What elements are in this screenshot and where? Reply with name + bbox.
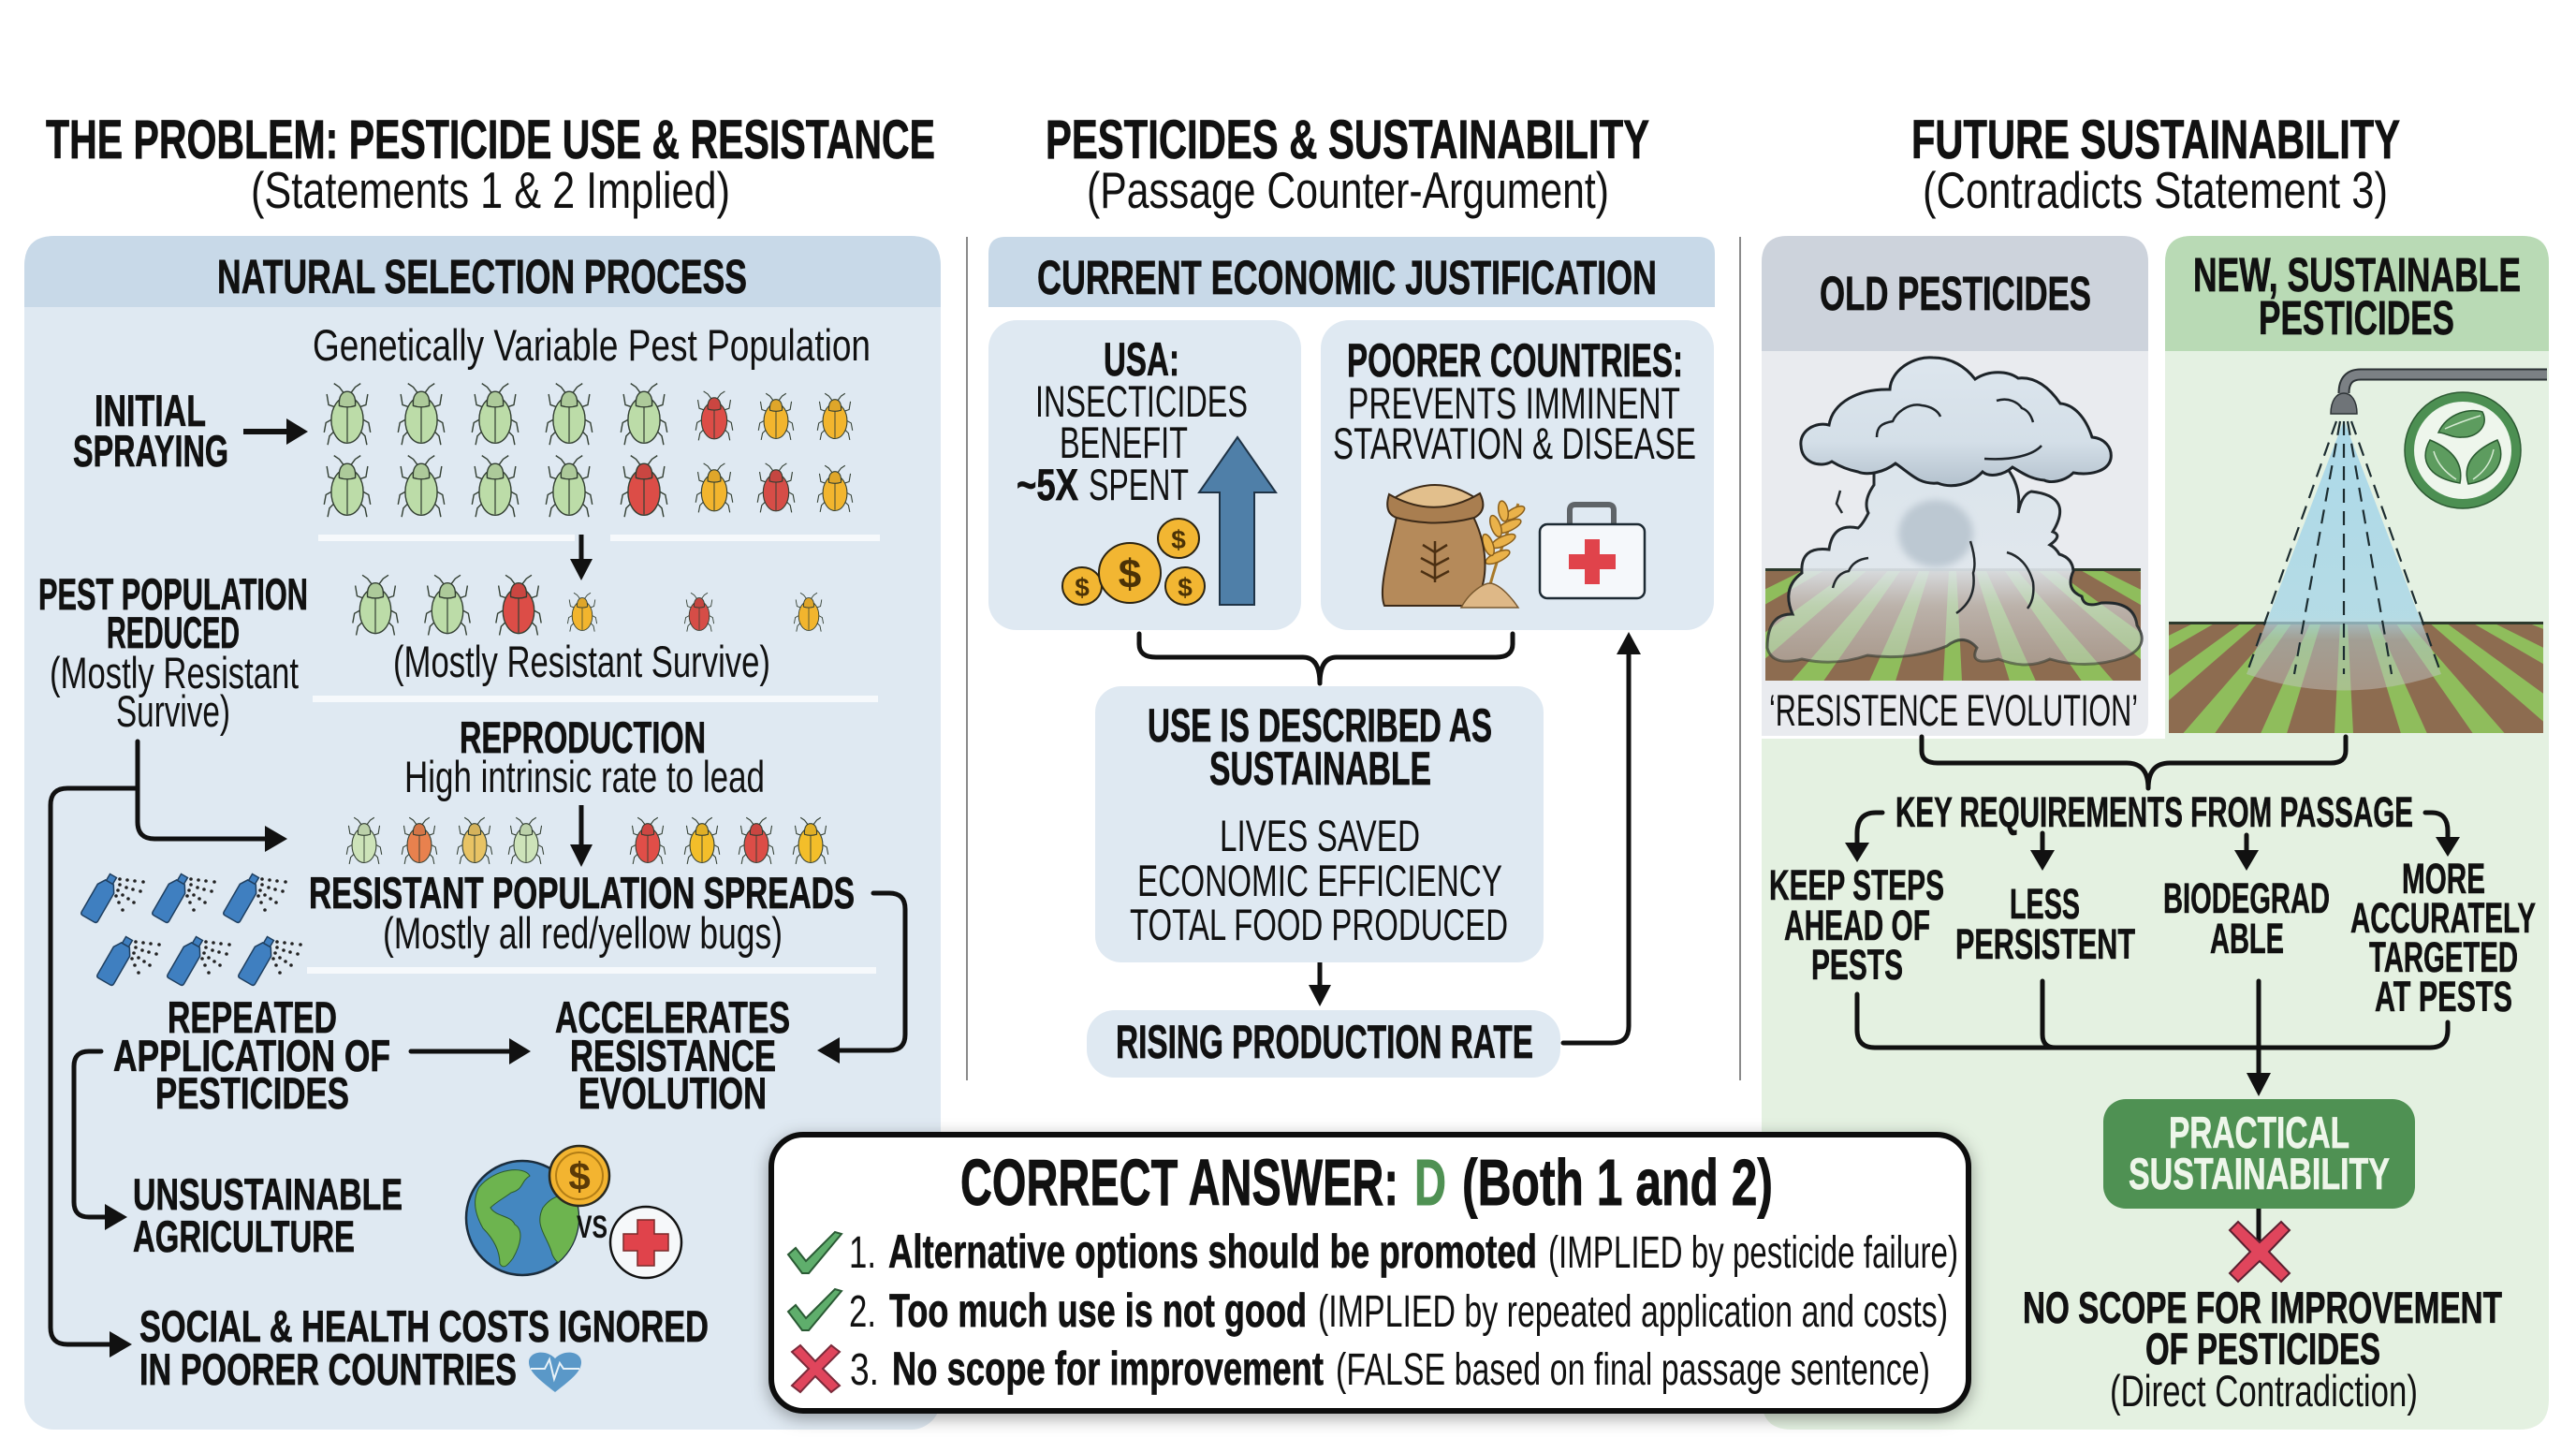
- arrow: survivors to reproduction: [138, 741, 287, 852]
- heading: the problem: THE PROBLEM: PESTICIDE USE & RESISTANCE: [46, 110, 935, 170]
- card: usa: USA:: [1104, 333, 1179, 386]
- icon: up arrow: [1199, 437, 1276, 605]
- icon: red cross mark: [2230, 1209, 2290, 1282]
- text: keep steps ahead: AHEAD OF: [1784, 902, 1930, 949]
- heading: future sustainability: [1911, 110, 2400, 219]
- icon: coins: [1062, 519, 1205, 605]
- divider: left and middle: [966, 237, 968, 1080]
- heading: correct answer: (Both 1 and 2): [1462, 1146, 1773, 1219]
- heading: pesticides and sustainability: PESTICIDES & SUSTAINABILITY: [1046, 110, 1649, 170]
- icon: coins: $: [1075, 573, 1090, 602]
- text: pest population reduced: (Mostly Resistant: [50, 648, 299, 697]
- illustration: field: [1765, 568, 2141, 681]
- statement one: 1.: [849, 1228, 876, 1278]
- icon: medical kit: [1540, 505, 1645, 598]
- text: pest population reduced: REDUCED: [107, 608, 240, 657]
- icons: surviving bugs: [353, 575, 824, 635]
- card: use is described as sustainable: TOTAL FOOD PRODUCED: [1130, 900, 1508, 949]
- text: mostly resistant survive: (Mostly Resistant Survive): [393, 637, 770, 686]
- heading: current economic justification: CURRENT ECONOMIC JUSTIFICATION: [1037, 251, 1657, 304]
- statement three: [850, 1343, 1930, 1395]
- card: poorer countries: PREVENTS IMMINENT: [1348, 378, 1680, 428]
- card: poorer countries: [1321, 320, 1714, 630]
- icons: spray bottles: [80, 871, 302, 986]
- panel: lower green requirements: [1762, 739, 2549, 1430]
- text: initial spraying: INITIAL: [95, 386, 206, 435]
- card: rising production rate: RISING PRODUCTION RATE: [1116, 1016, 1533, 1068]
- heading: pesticides and sustainability: (Passage Counter-Argument): [1087, 161, 1609, 219]
- text: pest population reduced: [38, 569, 308, 736]
- card: usa: ~5X: [1017, 460, 1078, 509]
- heading: future sustainability: FUTURE SUSTAINABILITY: [1911, 110, 2400, 170]
- icon: globe money vs health: [466, 1146, 681, 1278]
- arrows: requirements fan out: [1845, 813, 2460, 871]
- icon: check one: [788, 1232, 842, 1273]
- text: keep steps ahead: PESTS: [1811, 941, 1903, 989]
- text: pest population reduced: PEST POPULATION: [38, 569, 308, 619]
- statement two: [849, 1284, 1948, 1337]
- text: unsustainable agriculture: AGRICULTURE: [133, 1211, 355, 1261]
- panel: old pesticides: [1762, 236, 2148, 736]
- text: social and health costs: IN POORER COUNTRIES: [139, 1344, 517, 1394]
- arrow: application to acceleration: [411, 1038, 531, 1064]
- icon: coins: $: [1171, 525, 1186, 554]
- text: resistence evolution: ‘RESISTENCE EVOLUTION’: [1769, 685, 2138, 735]
- text: repeated application: REPEATED: [168, 992, 337, 1042]
- icon: coins: $: [1178, 573, 1193, 602]
- text: reproduction: High intrinsic rate to lead: [404, 752, 765, 801]
- icon: globe money vs health: $: [568, 1154, 591, 1198]
- card: rising production rate: [1087, 1010, 1560, 1078]
- text: reproduction: [404, 712, 765, 801]
- statement two: 2.: [849, 1287, 876, 1337]
- callout: correct answer: [771, 1135, 1969, 1411]
- heading: natural selection process: NATURAL SELECTION PROCESS: [217, 250, 747, 303]
- icons: offspring bugs: [346, 817, 828, 864]
- card: usa: BENEFIT: [1060, 418, 1188, 467]
- icon: globe money vs health: VS: [577, 1210, 607, 1245]
- icon: heart with pulse: [529, 1353, 581, 1392]
- statement three: No scope for improvement: [892, 1343, 1324, 1395]
- card: use is described as sustainable: LIVES SAVED: [1220, 811, 1420, 860]
- card: poorer countries: POORER COUNTRIES:: [1347, 334, 1683, 387]
- text: unsustainable agriculture: [133, 1169, 402, 1261]
- heading: correct answer: D: [1414, 1146, 1446, 1219]
- icon: coins: $: [1119, 551, 1141, 597]
- arrow: production feedback: [1563, 632, 1641, 1043]
- arrow: to rising production: [1309, 962, 1331, 1006]
- heading: new sustainable pesticides: [2193, 248, 2521, 345]
- arrow: spreads to accelerates: [817, 893, 905, 1064]
- text: reproduction: REPRODUCTION: [460, 712, 706, 762]
- text: repeated application: PESTICIDES: [155, 1068, 349, 1118]
- icon: sprayer pipe: [2331, 374, 2547, 414]
- icon: check two: [788, 1289, 842, 1330]
- icon: recycle leaves badge: [2405, 392, 2521, 508]
- text: no scope for improvement: [2023, 1283, 2502, 1416]
- card: use is described as sustainable: ECONOMIC EFFICIENCY: [1137, 856, 1502, 905]
- text: unsustainable agriculture: UNSUSTAINABLE: [133, 1169, 402, 1219]
- text: less persistent: [1955, 880, 2135, 968]
- arrow: spraying result: [570, 535, 593, 580]
- card: use is described as sustainable: [1095, 686, 1544, 962]
- text: accelerates resistance evolution: ACCELERATES: [555, 992, 790, 1042]
- icon: grain sack: [1383, 485, 1527, 608]
- text: biodegradable: BIODEGRAD: [2163, 874, 2330, 922]
- heading: pesticides and sustainability: [1046, 110, 1649, 219]
- arrow: application to unsustainable: [74, 1051, 127, 1230]
- card: use is described as sustainable: SUSTAINABLE: [1209, 742, 1431, 795]
- illustration: targeted spray: [2247, 420, 2441, 691]
- illustration: toxic cloud: [1767, 358, 2142, 665]
- text: less persistent: PERSISTENT: [1955, 920, 2135, 968]
- callout: practical sustainability: [2103, 1099, 2415, 1209]
- card: usa: [988, 320, 1301, 630]
- heading: the problem: (Statements 1 & 2 Implied): [251, 161, 730, 219]
- card: use is described as sustainable: USE IS DESCRIBED AS: [1148, 699, 1492, 752]
- text: accelerates resistance evolution: [555, 992, 790, 1118]
- text: resistant population spreads: (Mostly all red/yellow bugs): [383, 908, 783, 958]
- card: usa: INSECTICIDES: [1035, 376, 1248, 426]
- text: social and health costs: [139, 1301, 709, 1394]
- text: repeated application: [113, 992, 390, 1118]
- heading: new sustainable pesticides: PESTICIDES: [2259, 291, 2454, 345]
- connector: requirements to practical sustainability: [1857, 981, 2448, 1096]
- arrow: reproduction down: [570, 805, 593, 867]
- panel: current economic justification: [988, 237, 1715, 1078]
- icon: cross three: [792, 1345, 840, 1392]
- card: usa: SPENT: [1089, 460, 1189, 509]
- text: repeated application: APPLICATION OF: [113, 1031, 390, 1080]
- callout: practical sustainability: PRACTICAL: [2169, 1108, 2349, 1157]
- text: resistant population spreads: RESISTANT POPULATION SPREADS: [309, 868, 855, 917]
- text: pest population reduced: Survive): [116, 686, 230, 736]
- text: more accurately targeted: [2350, 855, 2536, 1020]
- text: biodegradable: ABLE: [2210, 915, 2284, 962]
- callout: practical sustainability: SUSTAINABILITY: [2129, 1149, 2390, 1198]
- text: biodegradable: [2163, 874, 2330, 962]
- text: initial spraying: SPRAYING: [73, 426, 228, 476]
- panel: new sustainable pesticides: [2165, 236, 2549, 739]
- text: keep steps ahead: [1769, 861, 1944, 989]
- text: resistant population spreads: [309, 868, 855, 958]
- text: social and health costs: SOCIAL & HEALTH COSTS IGNORED: [139, 1301, 709, 1351]
- connector: brace to requirements: [1922, 737, 2346, 788]
- heading: correct answer: CORRECT ANSWER:: [960, 1146, 1398, 1219]
- text: variable population label: Genetically Variable Pest Population: [313, 320, 871, 370]
- statement two: (IMPLIED by repeated application and costs): [1318, 1287, 1948, 1337]
- text: no scope for improvement: OF PESTICIDES: [2145, 1324, 2380, 1373]
- text: keep steps ahead: KEEP STEPS: [1769, 861, 1944, 909]
- icons: initial bug population: [324, 384, 853, 517]
- heading: the problem: [46, 110, 935, 219]
- statement two: Too much use is not good: [889, 1284, 1307, 1337]
- arrow: spraying to population: [243, 418, 308, 445]
- heading: future sustainability: (Contradicts Statement 3): [1923, 161, 2388, 219]
- text: initial spraying: [73, 386, 228, 476]
- arrow: survivors to social costs: [51, 788, 138, 1357]
- statement three: (FALSE based on final passage sentence): [1336, 1345, 1930, 1395]
- heading: old pesticides: OLD PESTICIDES: [1820, 267, 2091, 320]
- connector: brace to sustainable: [1139, 634, 1513, 683]
- statement one: (IMPLIED by pesticide failure): [1548, 1228, 1958, 1278]
- text: no scope for improvement: (Direct Contradiction): [2110, 1366, 2418, 1416]
- text: accelerates resistance evolution: RESISTANCE: [570, 1031, 776, 1080]
- text: accelerates resistance evolution: EVOLUTION: [578, 1068, 767, 1118]
- text: more accurately targeted: MORE: [2402, 855, 2485, 902]
- text: more accurately targeted: AT PESTS: [2375, 973, 2512, 1020]
- divider: middle and right: [1739, 237, 1741, 1080]
- statement three: 3.: [850, 1345, 879, 1395]
- illustration: field: [2169, 622, 2543, 733]
- text: less persistent: LESS: [2010, 880, 2080, 928]
- statement one: Alternative options should be promoted: [888, 1225, 1537, 1278]
- panel: natural selection process: [24, 236, 941, 1430]
- card: poorer countries: STARVATION & DISEASE: [1333, 418, 1696, 468]
